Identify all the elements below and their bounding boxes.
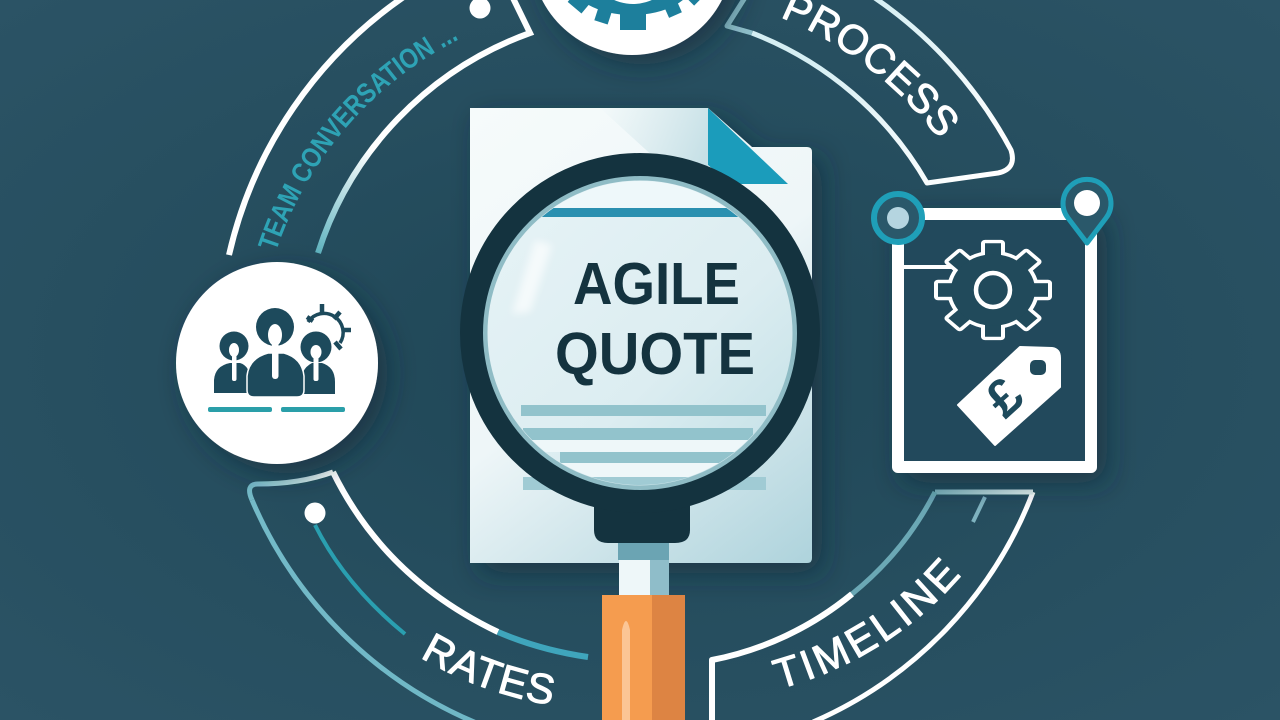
process panel start tip [727, 0, 752, 33]
title: agile quote [555, 251, 755, 387]
team badge lines [208, 407, 345, 412]
timeline top edge [935, 490, 1033, 494]
lens contents [514, 181, 766, 485]
panel: team conversation arc [226, 0, 534, 256]
document fold [708, 108, 788, 184]
document page [470, 108, 812, 563]
panel: estimate frame [874, 179, 1111, 467]
page sheen [600, 108, 708, 190]
badge circle [531, 0, 733, 55]
title line two: QUOTE [555, 321, 755, 387]
rates inner teal edge [498, 632, 588, 657]
timeline tick [973, 497, 985, 522]
process panel outline [752, 0, 1012, 183]
left pin [874, 194, 922, 242]
rates inner white edge [333, 472, 498, 632]
title line one: AGILE [573, 251, 740, 317]
rates top edge [250, 472, 333, 500]
icon: team badge [176, 262, 378, 464]
timeline lower inner edge [712, 594, 852, 720]
team badge circle [176, 262, 378, 464]
stripe three [562, 463, 718, 477]
handle collar [594, 490, 690, 543]
team panel outer edge [229, 0, 408, 255]
center person [247, 308, 304, 397]
panel: timeline arc [709, 490, 1036, 720]
price tag: £ [975, 366, 1035, 429]
magnifier lens [472, 164, 808, 502]
right person [300, 332, 335, 394]
price tag [958, 347, 1060, 445]
teal gear [568, 0, 703, 30]
team panel inner edge [318, 0, 530, 253]
text line three [560, 452, 745, 463]
handle neck top [618, 540, 669, 560]
small gear [307, 304, 351, 349]
glass glare [514, 242, 550, 314]
handle neck dark [650, 560, 669, 595]
lens ring bevel [485, 178, 795, 488]
panel: rates arc [247, 470, 588, 720]
handle grip [602, 595, 652, 720]
rates outer edge [252, 500, 500, 720]
text line one [521, 405, 766, 416]
team panel label: TEAM CONVERSATION ... [258, 36, 458, 247]
timeline label: TIMELINE [770, 557, 961, 687]
text line two [523, 428, 753, 440]
handle grip highlight [622, 621, 630, 720]
frame connector line [903, 265, 955, 269]
handle grip shade [652, 595, 685, 720]
team panel dot [470, 0, 490, 18]
text line four [592, 477, 688, 485]
timeline outer edge [813, 492, 1033, 720]
panel: process arc [724, 0, 1015, 186]
glass top glow [554, 181, 726, 208]
frame border [898, 214, 1091, 467]
timeline upper inner edge [852, 492, 935, 594]
document [470, 108, 812, 563]
magnifier handle [594, 490, 690, 720]
right pin [1063, 179, 1111, 243]
rates label: RATES [422, 633, 554, 704]
lens glass [483, 176, 797, 490]
frame outline gear [938, 243, 1048, 337]
teal heading bar [540, 208, 740, 217]
lower text line under lens [523, 477, 766, 490]
handle neck light [619, 560, 650, 595]
lens ring [472, 164, 808, 502]
rates dot [304, 502, 326, 524]
stripe two [532, 440, 748, 452]
icon: top gear badge [531, 0, 733, 55]
left person [214, 332, 250, 393]
rates inner teal line [315, 525, 405, 634]
